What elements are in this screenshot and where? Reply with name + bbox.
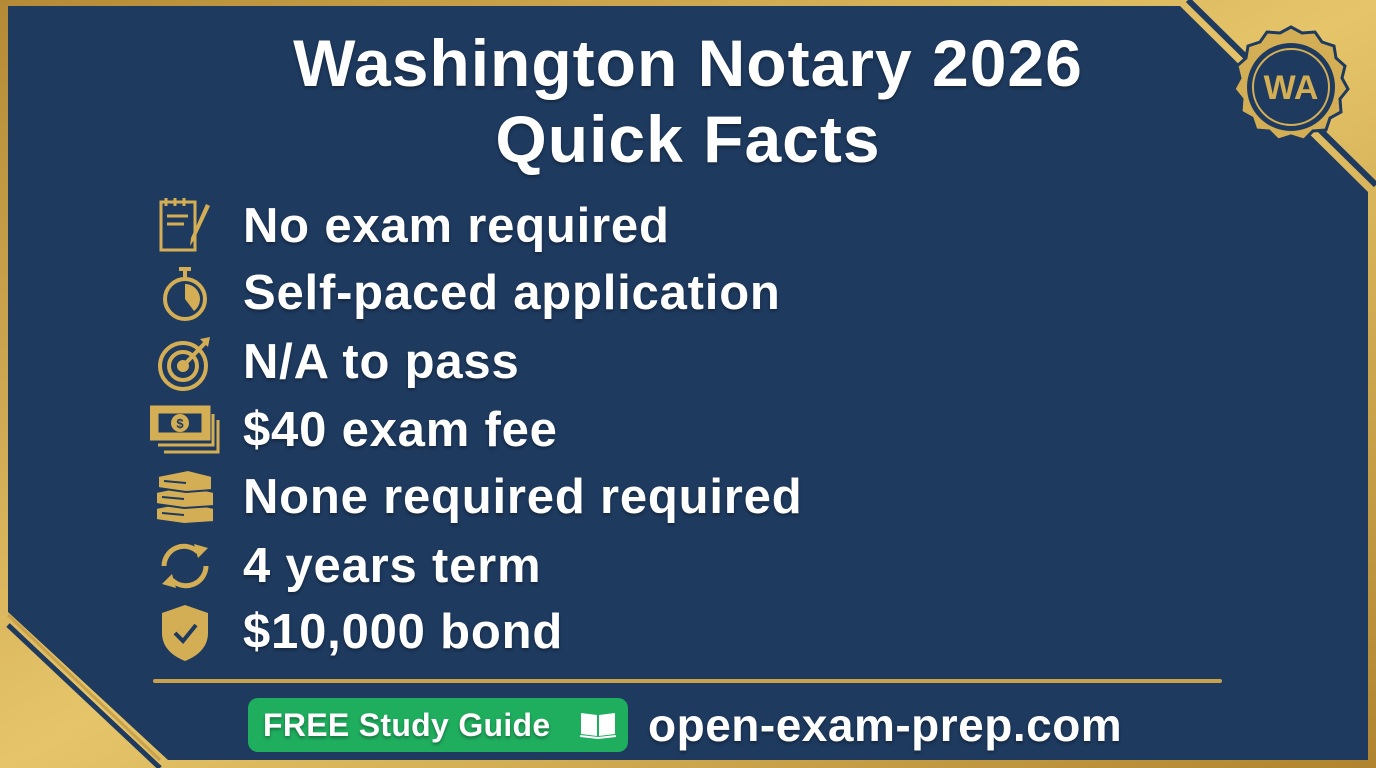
title: Quick Facts (495, 102, 881, 176)
item: N/A to pass: N/A to pass (243, 335, 520, 389)
website url: open-exam-prep.com (648, 699, 1122, 751)
icon: cash: $ (176, 416, 184, 431)
item: no exam: No exam required (243, 199, 670, 253)
item: none required: None required required (243, 470, 802, 524)
title (293, 26, 1083, 178)
icon: books (157, 471, 213, 523)
item: bond: $10,000 bond (243, 605, 563, 659)
icon: shield (162, 605, 208, 661)
icon: open book (580, 713, 616, 739)
badge: WA seal: WA (1264, 69, 1318, 107)
item: term: 4 years term (243, 539, 541, 593)
icon: target (158, 337, 210, 391)
icon: notepad (160, 198, 210, 252)
icon: stopwatch (163, 267, 207, 321)
title: Washington Notary 2026 (293, 26, 1083, 100)
callout: free study guide button: FREE Study Guide (263, 707, 550, 743)
item: self-paced: Self-paced application (243, 266, 781, 320)
item: exam fee: $40 exam fee (243, 403, 558, 457)
badge: WA seal (1236, 25, 1350, 138)
icon: renew arrows (162, 544, 208, 588)
callout: free study guide button (248, 698, 628, 752)
icon: cash (150, 406, 220, 454)
divider line (153, 679, 1222, 683)
